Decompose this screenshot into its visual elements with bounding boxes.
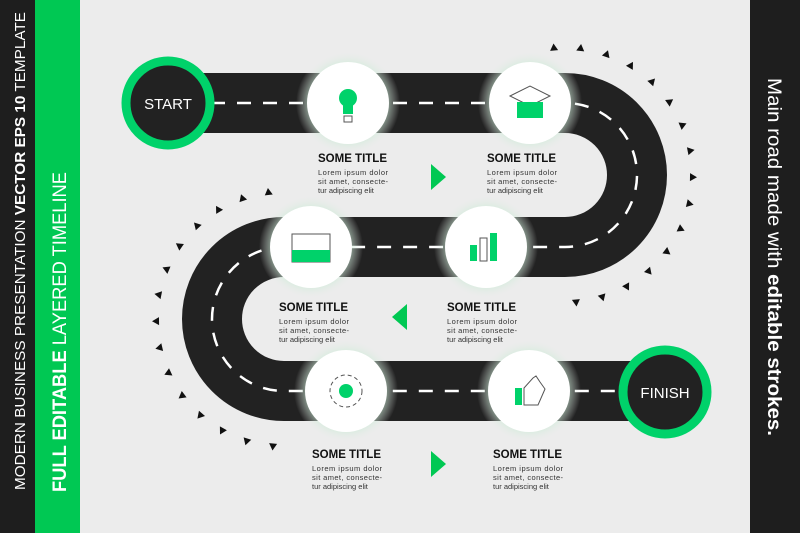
text blocks: sit amet, consecte- bbox=[279, 326, 350, 335]
finish badge bbox=[623, 350, 707, 434]
road bbox=[185, 103, 665, 391]
right dark bar: Main road made with editable strokes. bbox=[763, 78, 784, 436]
left green bar bbox=[35, 0, 80, 533]
text blocks: sit amet, consecte- bbox=[447, 326, 518, 335]
text blocks: sit amet, consecte- bbox=[318, 177, 388, 186]
arc markers right bbox=[550, 43, 697, 307]
text blocks: Lorem ipsum dolor bbox=[493, 464, 564, 473]
text blocks bbox=[279, 153, 564, 491]
text blocks: tur adipiscing elit bbox=[312, 482, 369, 491]
text blocks: tur adipiscing elit bbox=[493, 482, 550, 491]
text blocks: SOME TITLE bbox=[487, 153, 556, 165]
text blocks: tur adipiscing elit bbox=[487, 186, 544, 195]
node 5: gear bbox=[294, 339, 398, 443]
text blocks: SOME TITLE bbox=[318, 153, 387, 165]
text blocks: Lorem ipsum dolor bbox=[447, 317, 518, 326]
start badge bbox=[126, 61, 210, 145]
text blocks: SOME TITLE bbox=[312, 449, 381, 461]
text blocks: sit amet, consecte- bbox=[312, 473, 382, 482]
text blocks: Lorem ipsum dolor bbox=[279, 317, 350, 326]
node 2: cap bbox=[478, 51, 582, 155]
text blocks: SOME TITLE bbox=[279, 302, 348, 314]
node 3: briefcase bbox=[259, 195, 363, 299]
text blocks: sit amet, consecte- bbox=[487, 177, 558, 186]
text blocks: tur adipiscing elit bbox=[318, 186, 375, 195]
start badge: START bbox=[144, 96, 192, 113]
text blocks: Lorem ipsum dolor bbox=[487, 168, 558, 177]
arc markers left bbox=[152, 187, 277, 451]
finish badge: FINISH bbox=[640, 385, 690, 402]
text blocks: SOME TITLE bbox=[493, 449, 562, 461]
node 6: thumbs up bbox=[477, 339, 581, 443]
text blocks: Lorem ipsum dolor bbox=[312, 464, 382, 473]
right dark bar bbox=[750, 0, 800, 533]
text blocks: sit amet, consecte- bbox=[493, 473, 564, 482]
text blocks: tur adipiscing elit bbox=[447, 335, 504, 344]
node 4: chart bbox=[434, 195, 538, 299]
arrows bbox=[392, 164, 446, 477]
left dark bar: MODERN BUSINESS PRESENTATION VECTOR EPS 10 TEMPLATE bbox=[12, 12, 29, 490]
left green bar: FULL EDITABLE LAYERED TIMELINE bbox=[50, 172, 71, 492]
text blocks: Lorem ipsum dolor bbox=[318, 168, 388, 177]
text blocks: SOME TITLE bbox=[447, 302, 516, 314]
node 1: bulb bbox=[296, 51, 400, 155]
left dark bar bbox=[0, 0, 35, 533]
text blocks: tur adipiscing elit bbox=[279, 335, 336, 344]
